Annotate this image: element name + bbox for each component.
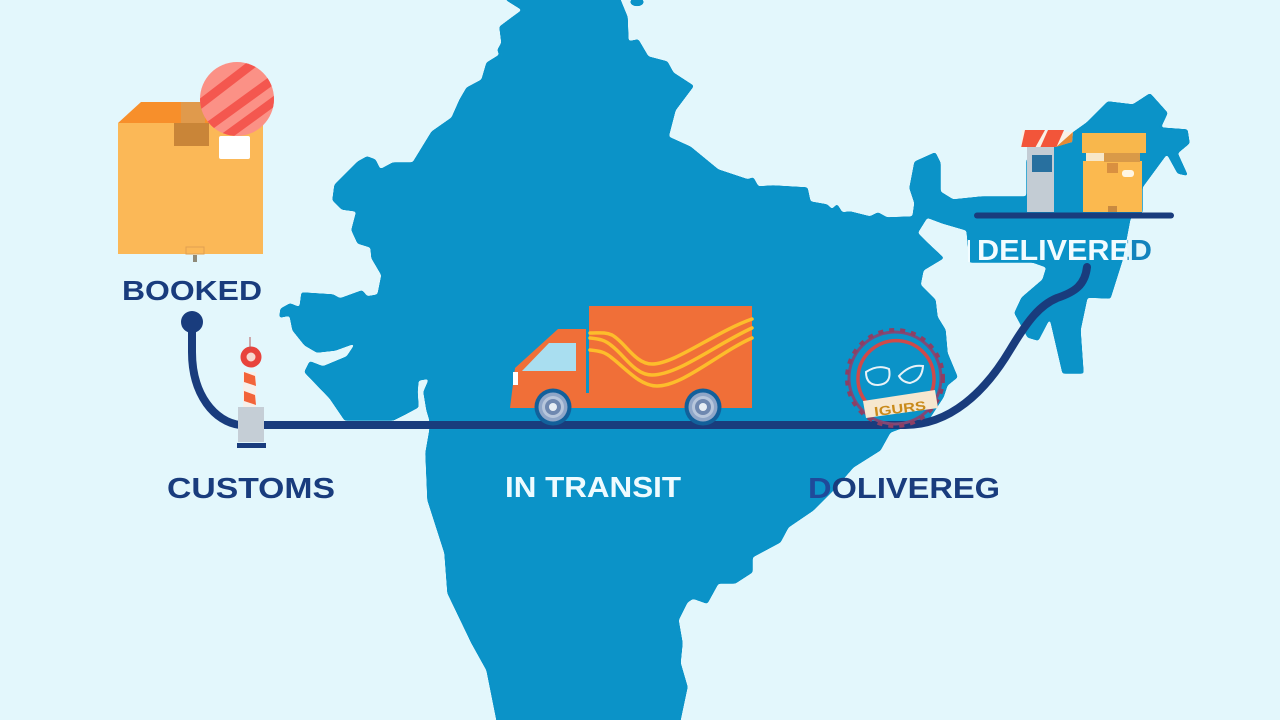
icon: customs post — [237, 337, 266, 448]
icon: delivery store — [1021, 130, 1073, 212]
icon: postal stamp seal — [847, 330, 943, 426]
truck rear wheel — [684, 388, 722, 426]
label: customs: CUSTOMS — [167, 473, 335, 505]
truck wave stripes — [590, 319, 752, 386]
map of India — [280, 0, 1189, 720]
icon: postal stamp seal: IGURS — [873, 398, 927, 419]
label: booked: BOOKED — [122, 275, 262, 306]
icon: booked parcel — [118, 62, 280, 262]
icon: postal truck — [510, 306, 752, 426]
label: delivered: DELIVERED — [977, 235, 1152, 267]
label: in transit: IN TRANSIT — [505, 472, 681, 504]
label: garbled delivered: DOLIVEREG — [808, 473, 1000, 505]
delivered label tab — [968, 240, 970, 262]
route start dot — [181, 311, 203, 333]
delivered shelf line — [977, 212, 1171, 218]
tracking route line — [192, 267, 1087, 425]
truck front wheel — [534, 388, 572, 426]
icon: delivered parcels — [1082, 133, 1146, 212]
